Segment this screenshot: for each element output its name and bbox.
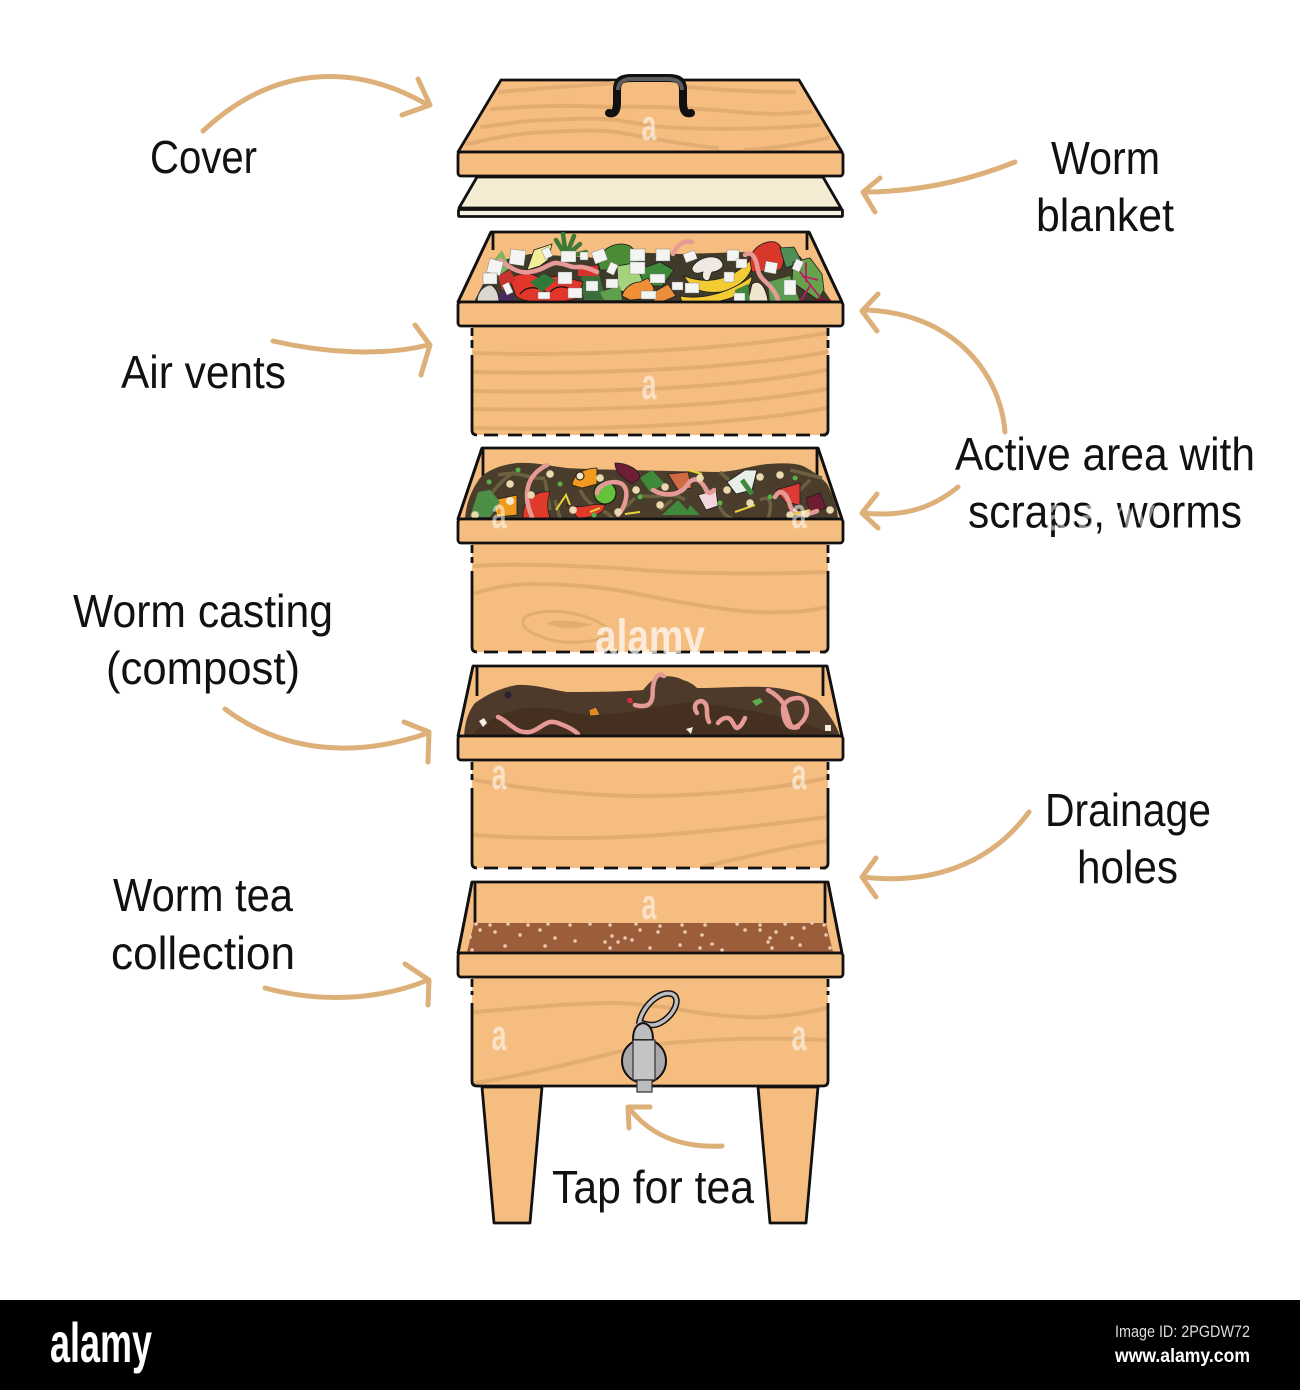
arrow: tap: [628, 1107, 722, 1146]
arrow: drainage holes: [862, 812, 1029, 897]
label: worm tea collection: Worm tea: [113, 869, 293, 921]
footer logo: alamy: [50, 1311, 152, 1374]
tray 2: top with decomposing scraps: [458, 448, 843, 543]
watermarks: alamy: [1045, 488, 1155, 540]
icon: cover handle: [609, 78, 691, 113]
compost and worms: [464, 675, 840, 736]
beet leaf: [792, 258, 824, 300]
watermarks: a: [792, 1011, 807, 1060]
tomato slices: [510, 274, 583, 302]
worm blanket: [458, 177, 842, 216]
watermarks: a: [642, 360, 657, 409]
tray 1: body with air vents: [472, 326, 828, 435]
label: active area: Active area with: [955, 428, 1255, 480]
label: cover: Cover: [150, 131, 257, 183]
worms: [500, 260, 597, 272]
watermarks: a: [492, 489, 507, 538]
tray 3: top with worm castings: [458, 666, 843, 760]
tray 4: collection body: [472, 977, 828, 1086]
watermarks: a: [792, 750, 807, 799]
mushroom: [692, 257, 723, 281]
watermarks: a: [792, 489, 807, 538]
tray 2: body with wood knot: [472, 543, 828, 652]
icon: tap: [622, 993, 676, 1092]
label: worm casting: Worm casting: [73, 585, 333, 637]
sticks: [480, 470, 822, 518]
label: active area: scraps, worms: [968, 486, 1242, 538]
drainage layer: [467, 923, 833, 952]
footer site: www.alamy.com: [1114, 1346, 1250, 1367]
label: worm tea collection: collection: [111, 927, 295, 979]
label: worm blanket: blanket: [1036, 189, 1174, 241]
fresh food scraps: [474, 234, 834, 302]
banana: [684, 258, 752, 292]
watermarks: alamy: [595, 611, 705, 664]
watermarks: a: [492, 1011, 507, 1060]
orange: [622, 278, 654, 300]
worms: [527, 465, 547, 517]
footer image id: Image ID: 2PGDW72: [1115, 1322, 1250, 1341]
watermarks: [492, 101, 1155, 1060]
watermarks: a: [492, 750, 507, 799]
watermarks: a: [642, 880, 657, 929]
tray 4: top with drainage holes: [458, 882, 843, 977]
vegetables: [615, 463, 640, 484]
watermarks: a: [642, 101, 657, 150]
apple and garlic: [750, 242, 784, 272]
legs: [482, 1087, 818, 1223]
label: air vents: Air vents: [121, 346, 286, 398]
arrow: air vents: [273, 325, 430, 375]
tray 1: top with fresh scraps: [458, 232, 843, 326]
arrow: active area lower: [862, 487, 958, 528]
leaves and greens: [598, 244, 638, 270]
eggplant and mushroom: [495, 292, 516, 302]
label: tap for tea: Tap for tea: [552, 1161, 754, 1213]
herbs: [556, 234, 586, 256]
tray 3: body: [472, 760, 828, 868]
decomposing food scraps: [465, 463, 838, 519]
footer bar: [0, 1300, 1300, 1390]
label: worm blanket: Worm: [1051, 132, 1160, 184]
arrow: worm tea collection: [265, 964, 429, 1005]
arrow: worm casting: [225, 709, 429, 762]
bin cover: [458, 78, 843, 176]
label: drainage holes: Drainage: [1045, 784, 1211, 836]
label: drainage holes: holes: [1077, 841, 1178, 893]
arrow: cover: [203, 76, 430, 131]
arrow: active area upper: [862, 294, 1005, 432]
label: worm casting: (compost): [106, 642, 300, 694]
white paper pieces: [483, 247, 804, 301]
arrow: worm blanket: [863, 162, 1015, 212]
